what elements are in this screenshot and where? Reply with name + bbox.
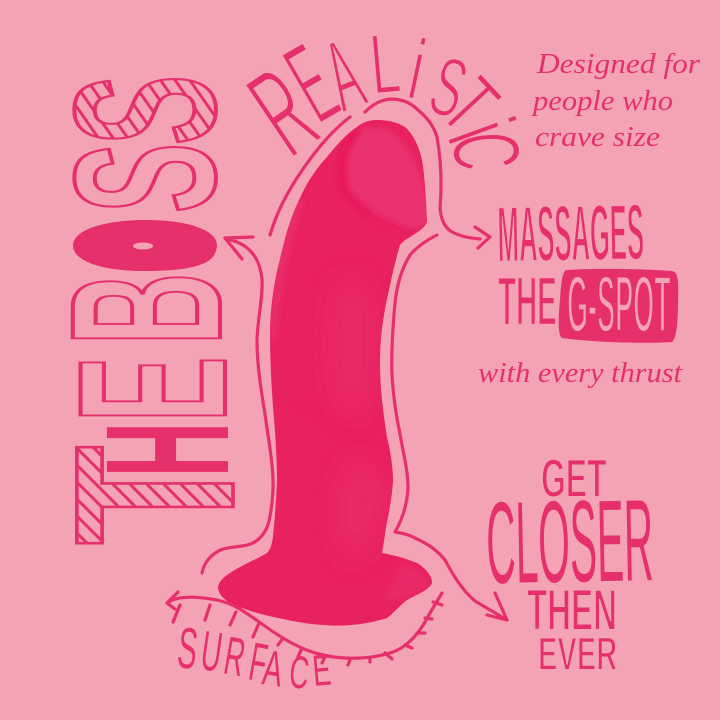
heading: REALISTIC: T (423, 60, 517, 151)
outline: top arc left (270, 117, 350, 235)
text: designed for people who crave size (531, 48, 701, 153)
heading: REALISTIC: i (402, 22, 432, 117)
arrow: arc to massages (365, 99, 490, 248)
text: get closer then ever (485, 447, 654, 681)
letter O solid: O (34, 217, 258, 274)
label: SURFACE: A (259, 639, 287, 698)
letter B outline: B (28, 273, 266, 345)
shading: body highlights (341, 301, 362, 389)
label: SURFACE: S (175, 614, 201, 682)
heading: REALISTIC: S (419, 39, 477, 137)
label: SURFACE: F (245, 632, 272, 694)
letter S outline: S (32, 143, 257, 213)
heading: REALISTIC: A (310, 16, 378, 134)
heading: REALISTIC: E (266, 20, 357, 147)
text: designed for people who crave size: Designed for (536, 48, 701, 80)
heading: REALISTIC: R (226, 41, 341, 183)
surface curve with ticks (167, 592, 442, 665)
g-spot badge: G-SPOT (567, 258, 671, 349)
heading: REALISTIC: C (431, 128, 539, 174)
product silhouette (218, 120, 432, 626)
text: get closer then ever: GET (541, 447, 607, 509)
title: THE BOSS (27, 75, 281, 545)
letter E outline: E (35, 357, 270, 422)
heading: REALISTIC: L (366, 15, 404, 112)
arrow: left contour to title (202, 237, 273, 573)
label: SURFACE (175, 614, 333, 699)
letter T striped: T (27, 445, 281, 545)
text: with every thrust: with every thrust (478, 357, 683, 389)
label: SURFACE: U (197, 620, 226, 684)
text: get closer then ever: EVER (538, 629, 617, 681)
heading: REALISTIC: i (427, 106, 535, 155)
text: get closer then ever: THEN (527, 578, 617, 644)
letter S striped: S (32, 75, 257, 145)
label: SURFACE: R (220, 626, 250, 689)
heading: REALISTIC (226, 15, 539, 183)
letter H solid: H (68, 422, 266, 477)
text: get closer then ever: CLOSER (485, 476, 654, 608)
shading: head (346, 127, 430, 234)
label: SURFACE: C (287, 646, 312, 699)
label: SURFACE: E (311, 645, 333, 696)
text: massages the g-spot (497, 187, 678, 349)
massages: MASSAGES (497, 187, 645, 280)
shading: vein (293, 405, 392, 475)
shading: head ridge (341, 130, 413, 234)
text: designed for people who crave size: people who (531, 85, 673, 117)
arrow: right contour to closer (392, 235, 507, 620)
text: designed for people who crave size: crave size (535, 121, 660, 153)
the: THE (498, 262, 557, 341)
